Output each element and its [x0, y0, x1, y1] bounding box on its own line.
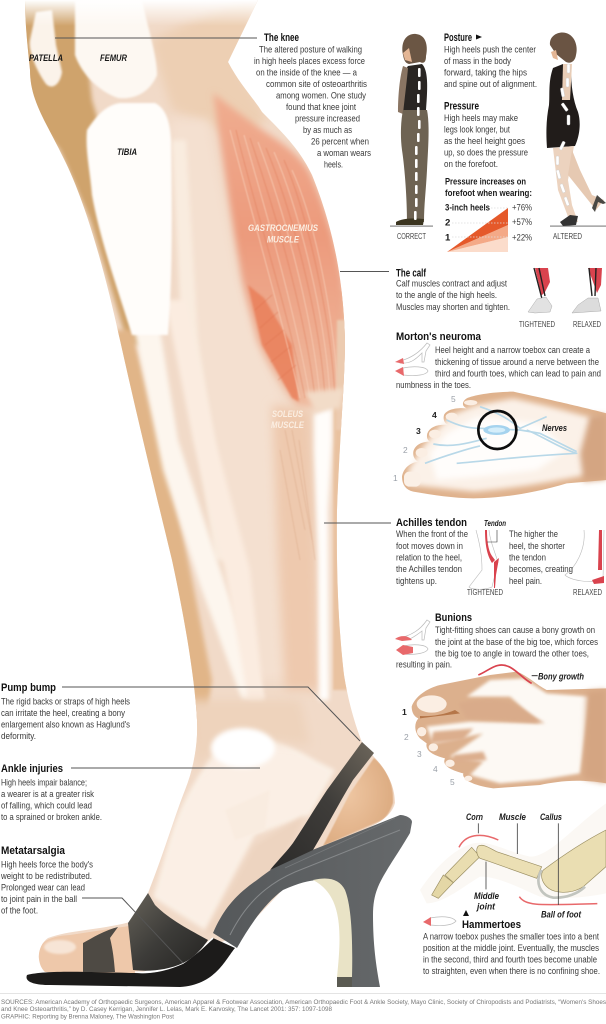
- illustration: shoe: [27, 742, 412, 987]
- chart: pressure on forefoot: +57%: [512, 217, 532, 228]
- calf muscle: [213, 93, 344, 407]
- anatomy labels: SOLEUS: [272, 408, 304, 419]
- text block: metatarsalgia: to joint pain in the ball: [1, 894, 77, 905]
- text block: the calf: Calf muscles contract and adjust: [396, 278, 507, 290]
- text block: posture and pressure: and spine out of alignment.: [444, 79, 537, 90]
- anatomy labels: [29, 52, 319, 430]
- text block: posture and pressure: up, so does the pressure: [444, 148, 528, 158]
- calf captions: [519, 319, 601, 329]
- text block: pump bump: The rigid backs or straps of high heels: [1, 696, 130, 708]
- shoe heel and footbed: [213, 815, 412, 987]
- text block: metatarsalgia: of the foot.: [1, 906, 38, 916]
- text block: metatarsalgia: weight to be redistributed.: [0, 871, 92, 882]
- text block: posture and pressure: forward, taking the hips: [444, 68, 527, 78]
- text block: the knee: [254, 32, 371, 170]
- footer: sources and credits: GRAPHIC: Reporting by Brenna Maloney, The Washington Post: [1, 1014, 174, 1020]
- toe strap: [83, 927, 118, 972]
- text block: the knee: by as much as: [303, 125, 352, 136]
- text block: Achilles tendon: When the front of the: [396, 529, 468, 540]
- bunion labels: 2: [404, 732, 409, 742]
- text block: posture and pressure: High heels push the center: [444, 44, 537, 56]
- text block: bunions: Bunions: [435, 612, 472, 624]
- chart: pressure on forefoot: +22%: [512, 232, 532, 244]
- text block: metatarsalgia: [0, 845, 93, 916]
- hammertoe labels: Corn: [466, 811, 483, 822]
- text block: the calf: Muscles may shorten and tighten.: [396, 302, 510, 313]
- hammertoe labels: [466, 811, 582, 920]
- chart: pressure on forefoot: 1: [445, 232, 451, 244]
- icon: tendon relaxed: [565, 530, 604, 584]
- text block: pump bump: deformity.: [1, 731, 36, 742]
- foot labels: 2: [403, 445, 408, 455]
- text block: the knee: common site of osteoarthritis: [266, 79, 367, 90]
- footer: sources and credits: and Knee Osteoarthritis,” by D. Casey Kerrigan, Jennifer L. Lelas, Mark E. Karvosky, The Lancet 2001: 357: 1097-1098: [1, 1006, 332, 1013]
- text block: Achilles tendon: becomes, creating: [509, 564, 573, 575]
- hammertoe labels: joint: [476, 900, 496, 912]
- text block: metatarsalgia: Metatarsalgia: [1, 845, 66, 857]
- text block: posture and pressure: as the heel height goes: [444, 136, 525, 147]
- tibia: [87, 103, 172, 335]
- patella: [30, 10, 62, 87]
- text block: the knee: The altered posture of walking: [259, 44, 362, 56]
- foot labels: 1: [393, 473, 398, 483]
- text block: posture and pressure: Pressure: [444, 100, 479, 112]
- text block: ankle injuries: of falling, which could lead: [1, 800, 92, 812]
- knee skin shading: [25, 2, 140, 346]
- toes: [38, 925, 138, 975]
- soleus: [272, 405, 320, 690]
- text block: posture and pressure: on the forefoot.: [444, 159, 498, 170]
- text block: Achilles tendon: tightens up.: [396, 576, 437, 587]
- text block: ankle injuries: High heels impair balance;: [1, 778, 87, 788]
- anatomy labels: TIBIA: [117, 146, 137, 157]
- text block: Achilles tendon: heel, the shorter: [509, 541, 566, 552]
- text block: Achilles tendon: relation to the heel,: [396, 552, 462, 564]
- icon: calf relaxed: [572, 268, 602, 313]
- leader lines: [55, 38, 391, 963]
- heel skin: [323, 758, 393, 846]
- figure: altered posture: [546, 33, 606, 227]
- text block: pump bump: [1, 682, 130, 742]
- foot labels: 4: [432, 410, 437, 420]
- icon: shoes, Morton's: [395, 343, 430, 376]
- illustration: hammertoe: [420, 803, 606, 905]
- text block: the calf: to the angle of the high heels.: [396, 290, 497, 301]
- text block: metatarsalgia: High heels force the body's: [1, 860, 93, 870]
- bunion labels: 3: [417, 749, 422, 759]
- text block: pump bump: enlargement also known as Haglund's: [1, 720, 130, 730]
- posture captions: ALTERED: [553, 231, 582, 241]
- foot labels: Nerves: [542, 422, 567, 433]
- text block: the calf: [396, 268, 510, 313]
- foot labels: [393, 394, 567, 483]
- text block: Achilles tendon: Achilles tendon: [396, 517, 467, 529]
- text block: pump bump: can irritate the heel, creating a bony: [1, 708, 125, 719]
- text block: Achilles tendon: The higher the: [509, 529, 558, 540]
- text block: Achilles tendon: the Achilles tendon: [396, 564, 462, 575]
- icon: calf tightened: [528, 268, 552, 313]
- hammertoe labels: Callus: [540, 811, 562, 822]
- chart: pressure on forefoot: 3-inch heels: [445, 202, 490, 214]
- icon: shoes, bunions: [395, 620, 430, 655]
- foot labels: 5: [451, 394, 456, 404]
- text block: posture and pressure: High heels may make: [444, 113, 518, 124]
- text block: hammertoes: [423, 910, 600, 977]
- ankle and foot bones: [153, 733, 335, 930]
- heel strap: [270, 742, 374, 870]
- text block: Achilles tendon: heel pain.: [509, 576, 542, 587]
- text block: bunions: resulting in pain.: [396, 660, 452, 670]
- hammertoe labels: Muscle: [499, 811, 526, 822]
- text block: Morton's neuroma: numbness in the toes.: [396, 380, 471, 391]
- text block: the knee: 26 percent when: [311, 136, 369, 148]
- text block: the knee: among women. One study: [276, 90, 366, 102]
- text block: Achilles tendon: Tendon: [484, 518, 506, 528]
- anatomy labels: FEMUR: [100, 52, 127, 63]
- illustration: foot with bunion: [412, 665, 606, 788]
- text block: pump bump: Pump bump: [1, 682, 56, 694]
- text block: ankle injuries: [1, 763, 102, 823]
- bunion labels: 4: [433, 764, 438, 774]
- footer: sources and credits: [0, 993, 606, 1020]
- text block: Achilles tendon: the tendon: [509, 552, 546, 564]
- text block: Achilles tendon: foot moves down in: [396, 541, 463, 552]
- icon: tendon tightened: [469, 530, 499, 589]
- chart: pressure on forefoot: forefoot when wearing:: [445, 188, 532, 199]
- text block: posture and pressure: of mass in the body: [444, 56, 511, 67]
- figure: correct posture: [390, 34, 433, 227]
- text block: Morton's neuroma: [396, 331, 601, 391]
- text block: the knee: on the inside of the knee — a: [256, 68, 358, 78]
- bunion labels: Bony growth: [538, 670, 584, 682]
- icon: shoe, hammertoes: [423, 917, 456, 926]
- text block: the calf: The calf: [396, 268, 426, 280]
- anatomy labels: GASTROCNEMIUS: [248, 222, 319, 233]
- achilles tendon: [314, 405, 332, 700]
- posture captions: [397, 231, 582, 241]
- front strap: [128, 893, 208, 971]
- text block: the knee: pressure increased: [295, 114, 360, 124]
- foot labels: 3: [416, 426, 421, 436]
- text block: bunions: [396, 612, 598, 670]
- text block: ankle injuries: Ankle injuries: [1, 763, 63, 775]
- illustration: foot with neuroma: [402, 392, 606, 498]
- hammertoe labels: Ball of foot: [541, 908, 582, 920]
- text block: ankle injuries: a wearer is at a greater risk: [1, 789, 94, 800]
- chart: pressure on forefoot: 2: [445, 218, 450, 228]
- tibia and fibula streaks: [132, 334, 249, 700]
- bunion labels: 5: [450, 777, 455, 787]
- posture captions: CORRECT: [397, 231, 427, 241]
- tendon captions: [467, 587, 602, 597]
- tendon captions: TIGHTENED: [467, 587, 503, 597]
- text block: Morton's neuroma: Morton's neuroma: [396, 331, 482, 343]
- anatomy labels: MUSCLE: [271, 419, 305, 430]
- anatomy labels: PATELLA: [29, 52, 63, 63]
- bunion labels: 1: [402, 707, 407, 717]
- calf captions: TIGHTENED: [519, 319, 555, 329]
- text block: posture and pressure: [444, 32, 537, 170]
- hammertoe labels: Middle: [474, 890, 499, 901]
- footer: sources and credits: SOURCES: American Academy of Orthopaedic Surgeons, American Apparel & Footwear Association, American Orthopaedic Foot & Ankle Society, Mayo Clinic, Society of Chiropodists and Podiatrists, “Women's Shoes: [1, 999, 606, 1006]
- chart: pressure on forefoot: [445, 176, 532, 252]
- text block: the knee: found that knee joint: [286, 102, 356, 113]
- text block: metatarsalgia: Prolonged wear can lead: [1, 882, 85, 894]
- sole: [27, 938, 235, 987]
- chart: pressure on forefoot: +76%: [512, 202, 532, 214]
- text block: Achilles tendon: [396, 517, 573, 587]
- femur: [75, 0, 157, 98]
- text block: hammertoes: Hammertoes: [462, 919, 521, 931]
- bunion labels: [402, 670, 584, 787]
- text block: posture and pressure: legs look longer, but: [444, 124, 510, 136]
- text block: the knee: a woman wears: [317, 148, 371, 159]
- text block: the knee: heels.: [324, 160, 343, 170]
- text block: ankle injuries: to a sprained or broken ankle.: [1, 812, 102, 823]
- text block: the knee: The knee: [264, 32, 299, 44]
- illustration: leg anatomy: [0, 0, 420, 1000]
- chart: pressure on forefoot: Pressure increases on: [445, 176, 526, 188]
- deep muscle wedge: [248, 285, 299, 402]
- anatomy labels: MUSCLE: [267, 234, 300, 244]
- text block: posture and pressure: Posture: [444, 32, 472, 44]
- text block: the knee: in high heels places excess force: [254, 56, 365, 67]
